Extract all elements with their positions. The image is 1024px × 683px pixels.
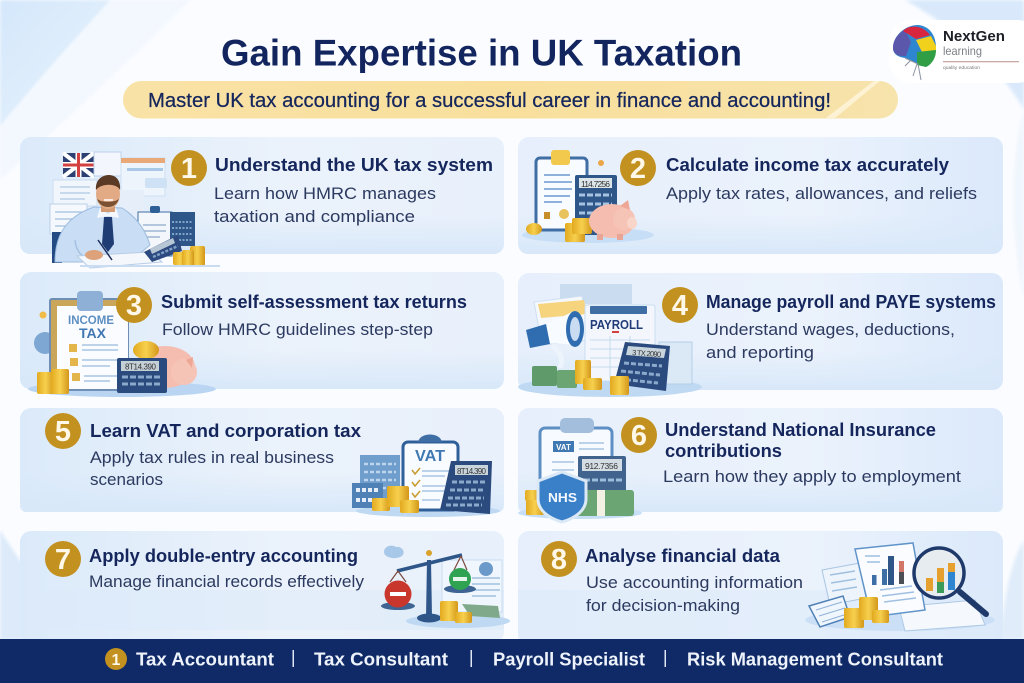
panel 6 description: Learn how they apply to employment bbox=[663, 467, 961, 486]
panel 8: analyse financial data bbox=[518, 531, 1003, 643]
subtitle banner bbox=[123, 81, 898, 118]
number badge 5: 5 bbox=[55, 416, 71, 448]
icon: VAT clipboard, buildings and calculator bbox=[352, 434, 500, 517]
logo: learning bbox=[943, 44, 982, 58]
icon: clipboard calculator and piggy bank: 114.7256 bbox=[581, 179, 610, 189]
panel 7: double-entry accounting bbox=[20, 531, 510, 643]
logo: NextGen bbox=[943, 29, 1005, 45]
number badge 7 bbox=[45, 541, 81, 577]
panel 6 heading: contributions bbox=[665, 440, 782, 461]
icon: NHS shield with clipboard: VAT bbox=[556, 442, 572, 452]
footer bar: careers: Tax Consultant bbox=[314, 648, 448, 670]
panel 6 heading bbox=[665, 419, 936, 461]
footer bar: careers: Payroll Specialist bbox=[493, 648, 645, 670]
icon: NHS shield with clipboard: 912.7356 bbox=[585, 461, 618, 471]
panel 5 description: scenarios bbox=[90, 470, 163, 489]
icon: brain mosaic bbox=[893, 25, 936, 80]
subtitle banner: Master UK tax accounting for a successful career in finance and accounting! bbox=[148, 90, 831, 112]
number badge 4 bbox=[662, 287, 698, 323]
number badge footer: 1 bbox=[112, 652, 121, 669]
panel 3: self-assessment bbox=[20, 272, 504, 397]
number badge 3 bbox=[116, 287, 152, 323]
panel 5 description bbox=[90, 448, 334, 489]
panel 2: calculate income tax bbox=[518, 137, 1003, 254]
panel 4 description: and reporting bbox=[706, 343, 814, 362]
icon: charts and magnifying glass bbox=[805, 543, 995, 631]
panel 4 description: Understand wages, deductions, bbox=[706, 320, 955, 339]
logo bbox=[889, 20, 1024, 83]
title: Gain Expertise in UK Taxation bbox=[221, 32, 742, 74]
logo: quality education bbox=[943, 65, 981, 70]
footer bar: careers bbox=[0, 639, 1024, 683]
panel 1: understand the UK tax system bbox=[20, 137, 504, 268]
number badge 8 bbox=[541, 541, 577, 577]
panel 8 description bbox=[586, 573, 803, 615]
panel 7 description: Manage financial records effectively bbox=[89, 572, 364, 591]
panel 1 description: Learn how HMRC manages bbox=[214, 184, 436, 203]
icon: VAT clipboard, buildings and calculator: VAT bbox=[415, 448, 445, 465]
icon: income tax clipboard: 8T14.390 bbox=[125, 362, 157, 372]
icon: balance scale bbox=[381, 546, 510, 628]
icon: income tax clipboard: TAX bbox=[79, 326, 106, 341]
panel 4 description bbox=[706, 320, 955, 362]
panel 2 heading: Calculate income tax accurately bbox=[666, 154, 950, 175]
panel 5 description: Apply tax rules in real business bbox=[90, 448, 334, 467]
icon: income tax clipboard: INCOME bbox=[68, 315, 114, 327]
panel 7 heading: Apply double-entry accounting bbox=[89, 545, 358, 566]
number badge footer bbox=[105, 648, 127, 670]
footer bar: careers: Tax Accountant bbox=[136, 648, 274, 670]
number badge 8: 8 bbox=[551, 544, 567, 576]
panel 1 description bbox=[214, 184, 436, 226]
panel 8 description: for decision-making bbox=[586, 596, 740, 615]
panel 2 description: Apply tax rates, allowances, and reliefs bbox=[666, 184, 977, 203]
number badge 1 bbox=[171, 150, 207, 186]
number badge 3: 3 bbox=[126, 290, 142, 322]
icon: tax accountant at desk bbox=[50, 152, 220, 268]
number badge 6 bbox=[621, 417, 657, 453]
panel 1 description: taxation and compliance bbox=[214, 207, 415, 226]
icon: income tax clipboard bbox=[28, 291, 216, 397]
number badge 6: 6 bbox=[631, 420, 647, 452]
panel 6 heading: Understand National Insurance bbox=[665, 419, 936, 440]
panel 3 description: Follow HMRC guidelines step-step bbox=[162, 320, 433, 339]
icon: payroll document with megaphone: 3 TX 2090 bbox=[632, 348, 661, 359]
panel 1 heading: Understand the UK tax system bbox=[215, 154, 493, 175]
panel 5: VAT and corporation tax bbox=[20, 408, 504, 517]
number badge 7: 7 bbox=[55, 544, 71, 576]
panel 8 heading: Analyse financial data bbox=[585, 545, 781, 566]
number badge 2 bbox=[620, 150, 656, 186]
number badge 4: 4 bbox=[672, 290, 688, 322]
footer bar: careers: Risk Management Consultant bbox=[687, 648, 943, 670]
panel 8 description: Use accounting information bbox=[586, 573, 803, 592]
icon: NHS shield with clipboard: NHS bbox=[548, 491, 577, 505]
panel 6: national insurance bbox=[518, 408, 1003, 522]
panel 4 heading: Manage payroll and PAYE systems bbox=[706, 291, 996, 312]
panel 4: payroll bbox=[518, 273, 1003, 397]
panel 3 heading: Submit self-assessment tax returns bbox=[161, 291, 467, 312]
panel 5 heading: Learn VAT and corporation tax bbox=[90, 420, 362, 441]
icon: payroll document with megaphone: PAYROLL bbox=[590, 318, 643, 332]
icon: payroll document with megaphone bbox=[518, 284, 702, 397]
number badge 1: 1 bbox=[181, 153, 197, 185]
number badge 2: 2 bbox=[630, 153, 646, 185]
icon: NHS shield with clipboard bbox=[518, 418, 642, 522]
icon: clipboard calculator and piggy bank bbox=[522, 150, 654, 243]
icon: VAT clipboard, buildings and calculator: 8T14.390 bbox=[457, 467, 487, 476]
number badge 5 bbox=[45, 413, 81, 449]
